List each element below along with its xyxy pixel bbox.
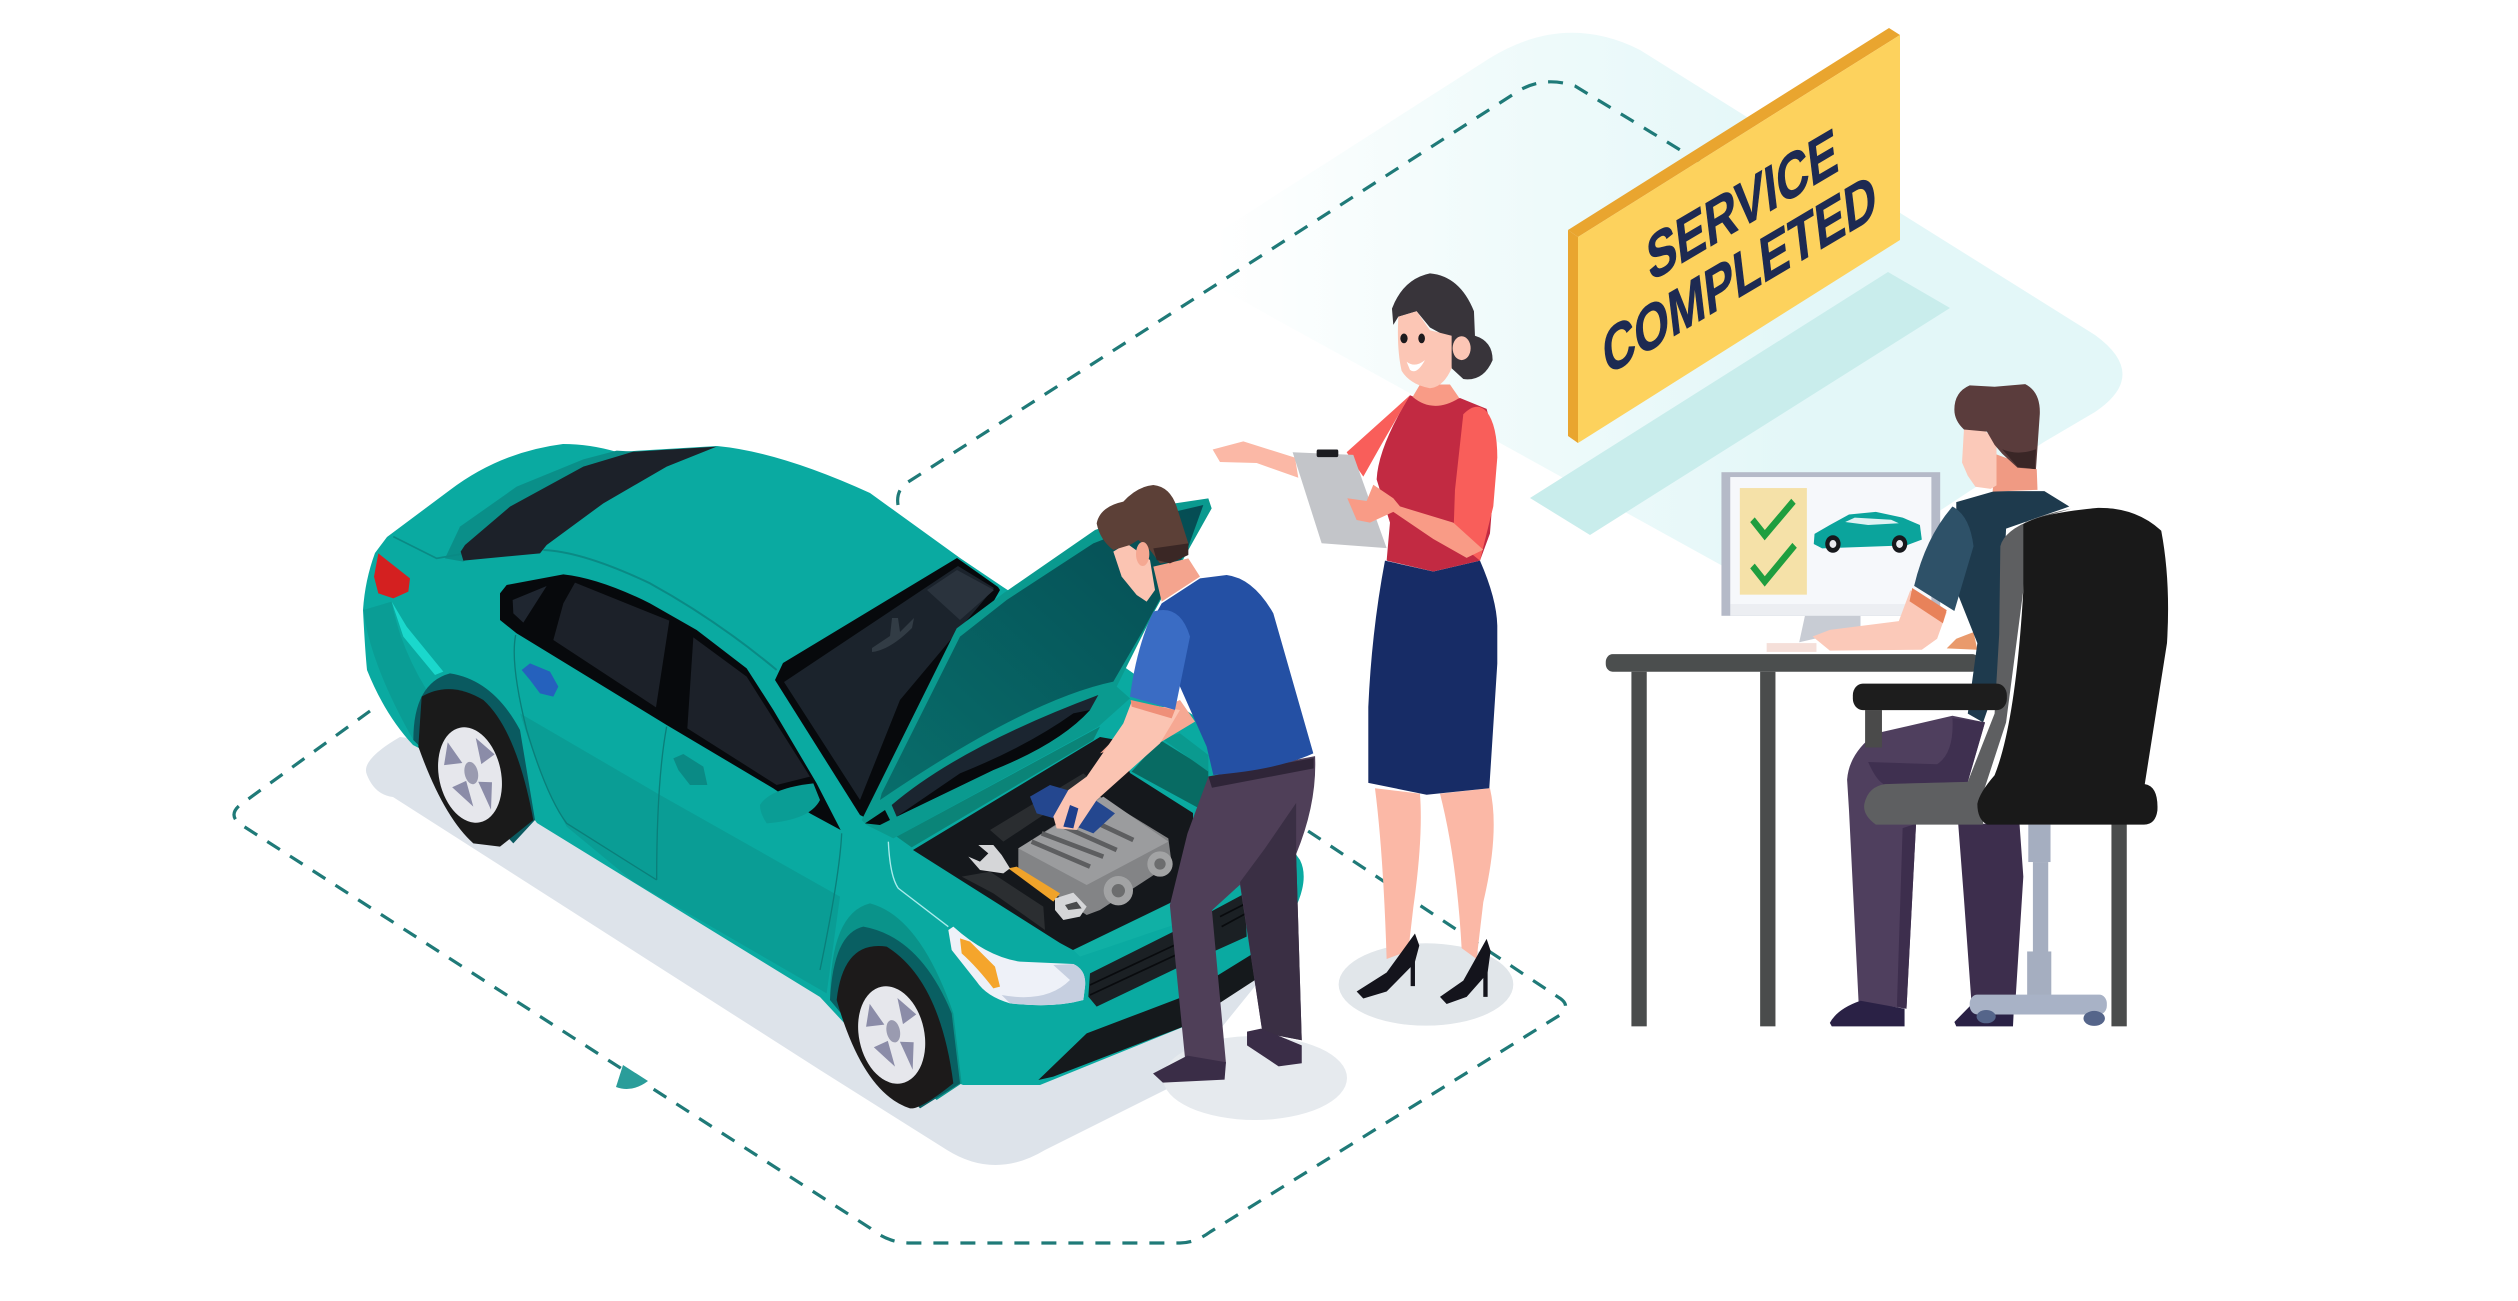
face [1113,543,1155,602]
car [363,444,1304,1108]
rear door window [553,583,669,707]
wrench [968,845,1087,920]
rear rim [430,721,510,829]
band: darker floor strip under sign [1530,272,1950,535]
check marks [1752,501,1795,581]
far lower leg [1958,824,2023,1004]
hair [1097,485,1188,563]
windshield frame [775,558,1000,820]
skirt [1368,561,1497,795]
windshield reflection [927,570,994,620]
rear wheel arch [413,673,535,843]
side mirror [760,783,820,823]
sign [1568,28,1900,443]
desk station [1606,384,2168,1026]
outstretched arm [1213,441,1298,478]
desk [1606,654,2127,1026]
woman with clipboard [1213,273,1513,1026]
forearm and hand [1347,485,1483,558]
upper body [1097,485,1313,775]
dark parts [990,773,1093,842]
engine bay [913,737,1193,950]
A-pillar seam [820,833,842,970]
rear window surround [445,451,633,562]
engine block [1018,797,1172,915]
chair [1853,508,2168,825]
sign text: line 2: COMPLETED [1599,161,1880,390]
rear window [461,447,717,561]
legs [1375,788,1494,959]
mechanic far arm [1100,700,1195,753]
seated man [1813,384,2069,1026]
torso [1956,491,2069,722]
keyboard [1767,643,1816,652]
chair base [1970,825,2107,1026]
pants [1153,756,1315,1083]
sign face [1578,35,1900,443]
open hood [862,498,1212,847]
arm [1813,590,1947,651]
grille [1088,893,1247,1007]
front arch inner [830,927,960,1108]
hair back and bun [1392,273,1493,379]
ear [1136,542,1149,566]
chair back and seat [1977,508,2168,825]
teal inner wall [1132,740,1208,813]
sign top edge [1568,28,1900,237]
torso [1143,575,1313,775]
sign side edge [1568,230,1578,443]
clipboard [1293,450,1387,548]
arrow marker on route [616,1065,648,1089]
ground shadow [1339,943,1513,1026]
lower door shade [520,713,840,993]
window frame [500,574,841,830]
deck line [393,537,462,558]
car ground shadow [366,737,1260,1165]
mechanic [1097,485,1315,1083]
engine compartment [862,498,1212,930]
quarter window [513,586,547,623]
rear tire [418,689,533,847]
headlight [948,927,1085,1005]
car rear half [363,447,841,993]
dashed route: upper segment [898,82,1700,505]
hair [1954,384,2040,469]
mechanic ground shadow [1163,1036,1347,1120]
front tire [837,946,953,1108]
door lines [514,635,667,880]
background: pale cyan isometric floor [1196,33,2122,570]
front rim [849,980,934,1090]
roof line [543,550,777,670]
monitor stand [1799,616,1861,642]
neck [1153,558,1200,602]
rear view mirror [872,618,914,652]
blue part [1030,785,1115,833]
left hand [1947,632,1977,650]
armrest [1853,684,2007,710]
rear highlight [392,602,443,675]
car front [820,833,1255,1108]
amber indicator [960,938,1000,988]
sleeve [1914,507,1974,611]
cuff [1131,700,1175,718]
front arch outer [830,903,962,1100]
tail lamp [374,553,410,598]
head [1962,429,1997,489]
lower grille [1038,953,1255,1080]
chair grey shell [1864,509,2071,825]
checklist note [1740,488,1807,595]
mechanic fingers on part [1063,805,1078,828]
bonnet lip [1073,880,1237,957]
face [1398,311,1452,388]
fuel cap [522,663,558,697]
sign text: line 1: SERVICE [1643,115,1841,296]
dashed route: lower segment [234,711,1566,1243]
chair arm post [1865,710,1882,748]
monitor [1721,472,1940,616]
fender highlight [888,842,948,927]
near leg [1847,716,1985,1009]
front door window [687,637,810,785]
windshield glass [784,566,994,800]
sleeve left [1347,395,1410,477]
shoes [1357,934,1491,1004]
sleeve [1130,610,1190,710]
neck [1993,454,2038,492]
ear [1453,336,1471,360]
blouse [1377,395,1497,571]
neck and collar [1413,384,1459,406]
mini car [1814,512,1922,553]
mechanic near arm [1053,702,1180,830]
shoes [1830,1001,2014,1026]
sleeve right [1453,407,1497,561]
door handle [673,754,707,785]
eyes and smile [1400,334,1425,371]
car body [363,444,1304,1085]
